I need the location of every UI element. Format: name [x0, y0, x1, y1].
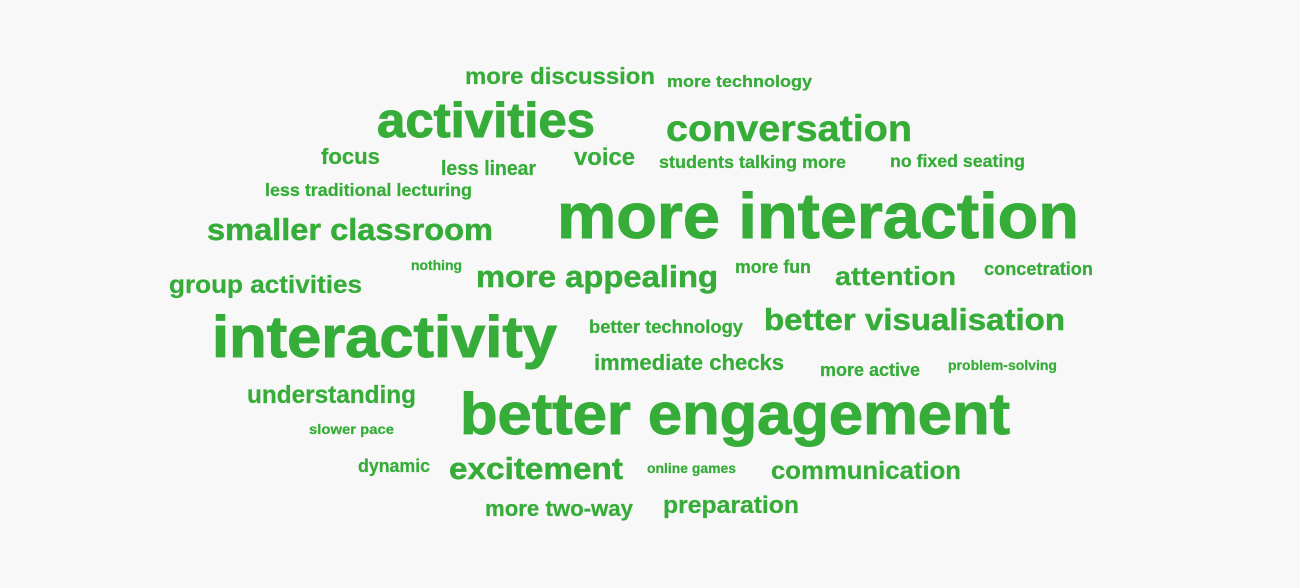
- word: communication: communication: [771, 457, 961, 485]
- word: problem-solving: problem-solving: [948, 357, 1057, 373]
- word: more discussion: more discussion: [465, 63, 655, 89]
- word: more technology: more technology: [667, 72, 813, 91]
- word: less traditional lecturing: less traditional lecturing: [265, 180, 472, 200]
- word: more fun: more fun: [735, 257, 811, 277]
- word: preparation: preparation: [663, 492, 799, 519]
- word: better technology: better technology: [589, 317, 743, 337]
- word: group activities: group activities: [169, 271, 362, 299]
- word: more appealing: more appealing: [476, 259, 718, 294]
- word: better engagement: better engagement: [460, 382, 1010, 447]
- word: activities: activities: [377, 94, 595, 148]
- word: more interaction: more interaction: [557, 180, 1079, 252]
- word: understanding: understanding: [247, 381, 416, 409]
- word: more active: more active: [820, 360, 920, 380]
- word: more two-way: more two-way: [485, 496, 634, 521]
- word: conversation: conversation: [666, 108, 912, 149]
- word: no fixed seating: no fixed seating: [890, 151, 1025, 171]
- word: interactivity: interactivity: [212, 305, 557, 370]
- word: smaller classroom: smaller classroom: [207, 212, 493, 247]
- word: nothing: nothing: [411, 257, 462, 273]
- word: voice: voice: [574, 144, 635, 171]
- word: slower pace: slower pace: [309, 421, 394, 437]
- word: students talking more: students talking more: [659, 152, 846, 172]
- word: immediate checks: immediate checks: [594, 350, 784, 375]
- word: dynamic: dynamic: [358, 456, 430, 476]
- word: excitement: excitement: [449, 451, 623, 486]
- word: attention: attention: [835, 261, 956, 291]
- word: online games: online games: [647, 460, 736, 476]
- word: better visualisation: better visualisation: [764, 302, 1065, 337]
- word: focus: focus: [321, 144, 380, 169]
- word: less linear: less linear: [441, 158, 536, 180]
- word: concetration: concetration: [984, 259, 1093, 279]
